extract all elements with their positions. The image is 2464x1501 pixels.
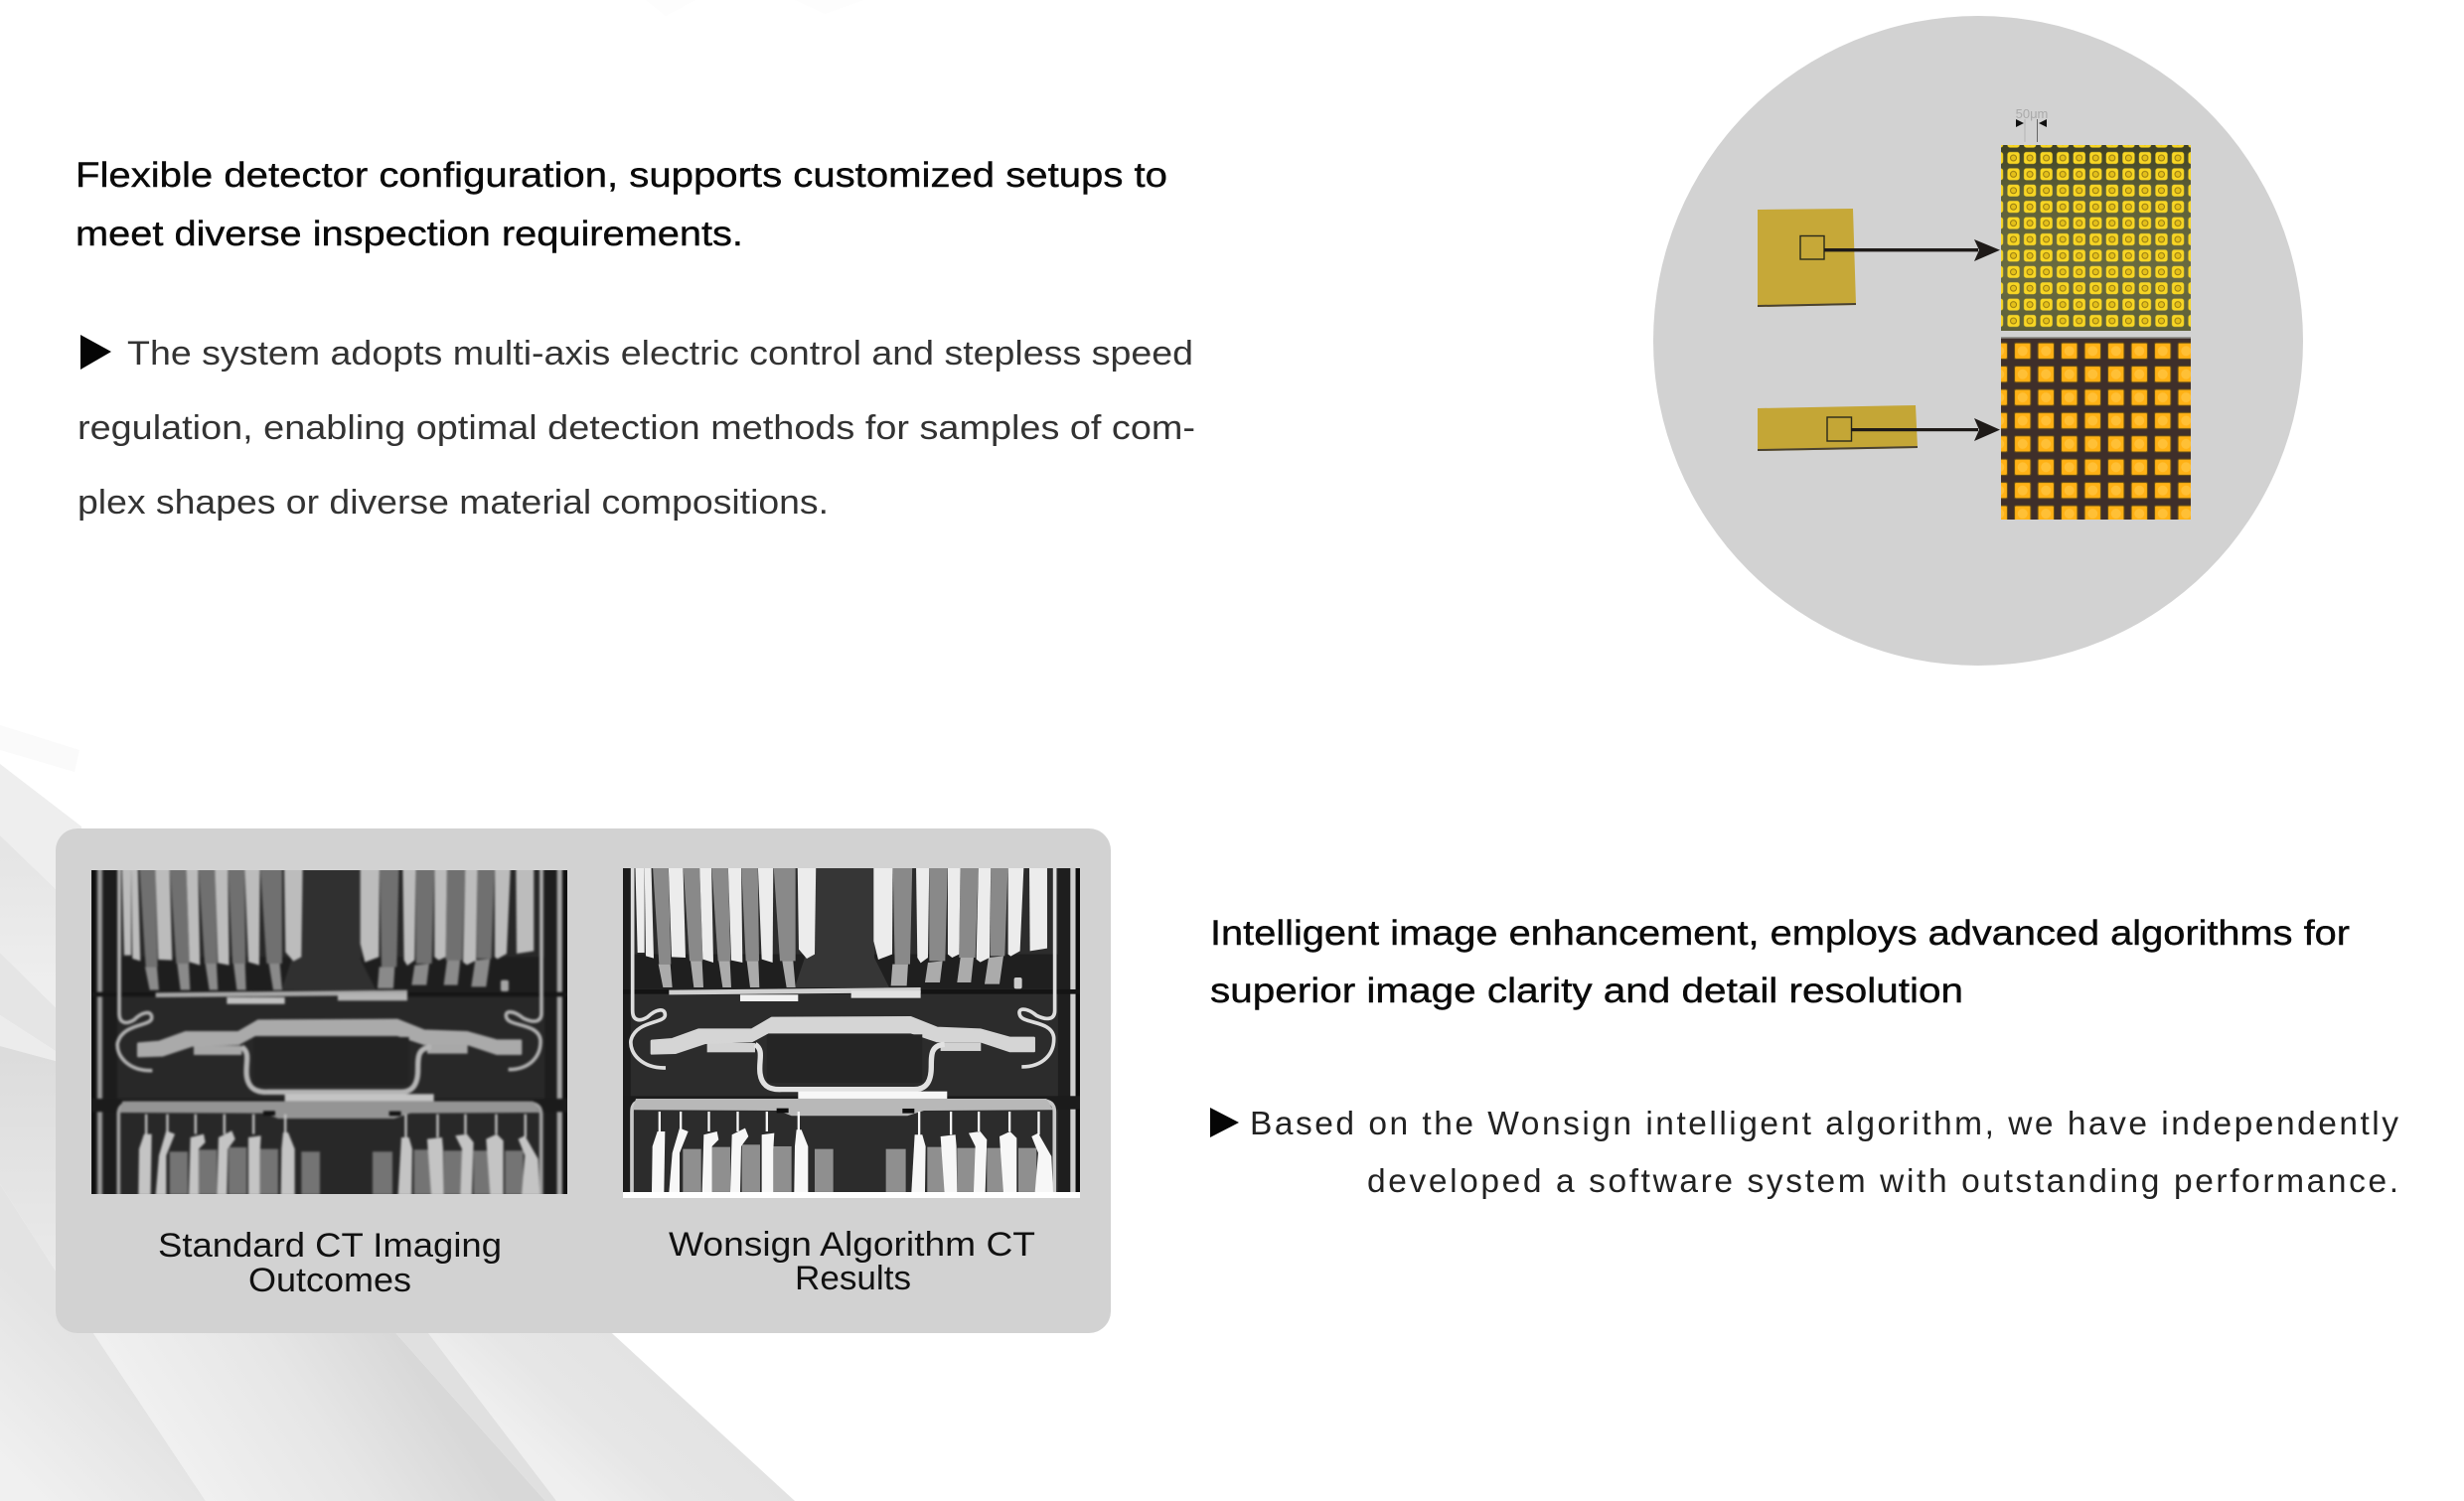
background swoosh (0, 764, 795, 1501)
fine pixel grid (2001, 145, 2191, 331)
heading: flexible detector configuration (76, 156, 1167, 253)
heading: flexible detector configuration: meet diverse inspection requirements. (76, 215, 743, 253)
icon: bullet triangle, enhancement text (1210, 1108, 1239, 1137)
text block: detector description: The system adopts multi-axis electric control and stepless speed (127, 335, 1193, 373)
pixel pitch dimension: 50μm (2016, 106, 2048, 121)
strip detector chip (1758, 405, 1918, 451)
caption: Wonsign CT (669, 1226, 1035, 1297)
caption: Wonsign CT: Results (795, 1260, 911, 1297)
arrow: square chip to fine pixel grid (1824, 239, 2000, 261)
heading: flexible detector configuration: Flexible detector configuration, supports customized setups to (76, 156, 1167, 195)
pixel pitch dimension (2016, 106, 2048, 142)
text block: detector description: regulation, enabling optimal detection methods for samples of com- (77, 409, 1195, 447)
image: Wonsign algorithm CT (623, 868, 1080, 1198)
heading: intelligent image enhancement: Intelligent image enhancement, employs advanced algorithms for (1210, 914, 2350, 953)
caption: Wonsign CT: Wonsign Algorithm CT (669, 1226, 1035, 1264)
circle background (1653, 16, 2303, 666)
panel: CT comparison (47, 828, 1123, 1333)
caption: standard CT (158, 1227, 502, 1299)
heading: intelligent image enhancement (1210, 914, 2350, 1010)
text block: enhancement description: Based on the Wonsign intelligent algorithm, we have independently (1250, 1106, 2398, 1142)
icon: bullet triangle, detector text (80, 335, 111, 370)
caption: standard CT: Standard CT Imaging (158, 1227, 502, 1265)
arrow: strip chip to coarse pixel grid (1851, 418, 2000, 441)
coarse pixel grid (2001, 337, 2191, 520)
heading: intelligent image enhancement: superior image clarity and detail resolution (1210, 972, 1963, 1010)
text block: enhancement description: developed a software system with outstanding performance. (1367, 1163, 2398, 1200)
text block: enhancement description (1250, 1106, 2398, 1200)
text block: detector description: plex shapes or diverse material compositions. (77, 484, 829, 522)
text block: detector description (77, 335, 1195, 522)
image: standard CT (91, 870, 567, 1194)
panel: detector circle diagram (1653, 16, 2303, 666)
caption: standard CT: Outcomes (248, 1262, 411, 1299)
panel background (56, 828, 1111, 1333)
square detector chip (1758, 209, 1856, 307)
